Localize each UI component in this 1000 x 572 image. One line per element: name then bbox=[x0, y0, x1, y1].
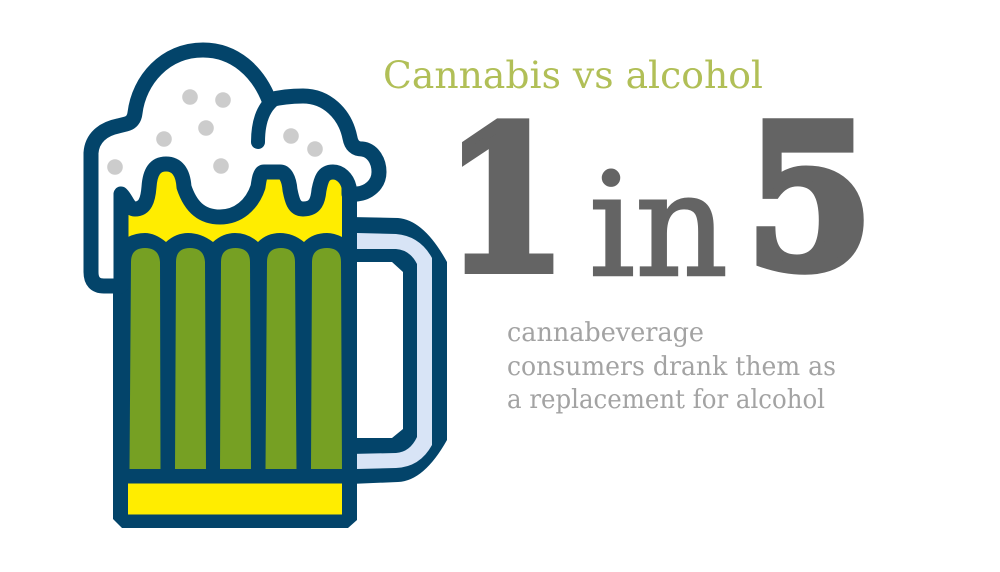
beer head: yellow bbox=[128, 170, 342, 242]
foam hook line bbox=[258, 101, 272, 142]
foam bbox=[91, 50, 379, 286]
line 2: consumers drank them as bbox=[507, 352, 836, 382]
statistic: 1 in 5 bbox=[444, 82, 874, 317]
icon: beer mug bbox=[91, 50, 447, 528]
numeral 5: 5 bbox=[746, 82, 874, 315]
description text bbox=[507, 318, 836, 415]
mug body bbox=[113, 185, 357, 528]
heading: Cannabis vs alcohol bbox=[383, 54, 763, 97]
mug base: yellow band bbox=[128, 484, 342, 514]
line 3: a replacement for alcohol bbox=[507, 385, 825, 415]
foam bubbles bbox=[107, 89, 323, 175]
beer stripes: green bbox=[130, 248, 342, 469]
numeral 1: 1 bbox=[444, 85, 567, 317]
mug handle bbox=[350, 217, 447, 484]
line 1: cannabeverage bbox=[507, 318, 704, 348]
word: in: in bbox=[589, 142, 728, 309]
